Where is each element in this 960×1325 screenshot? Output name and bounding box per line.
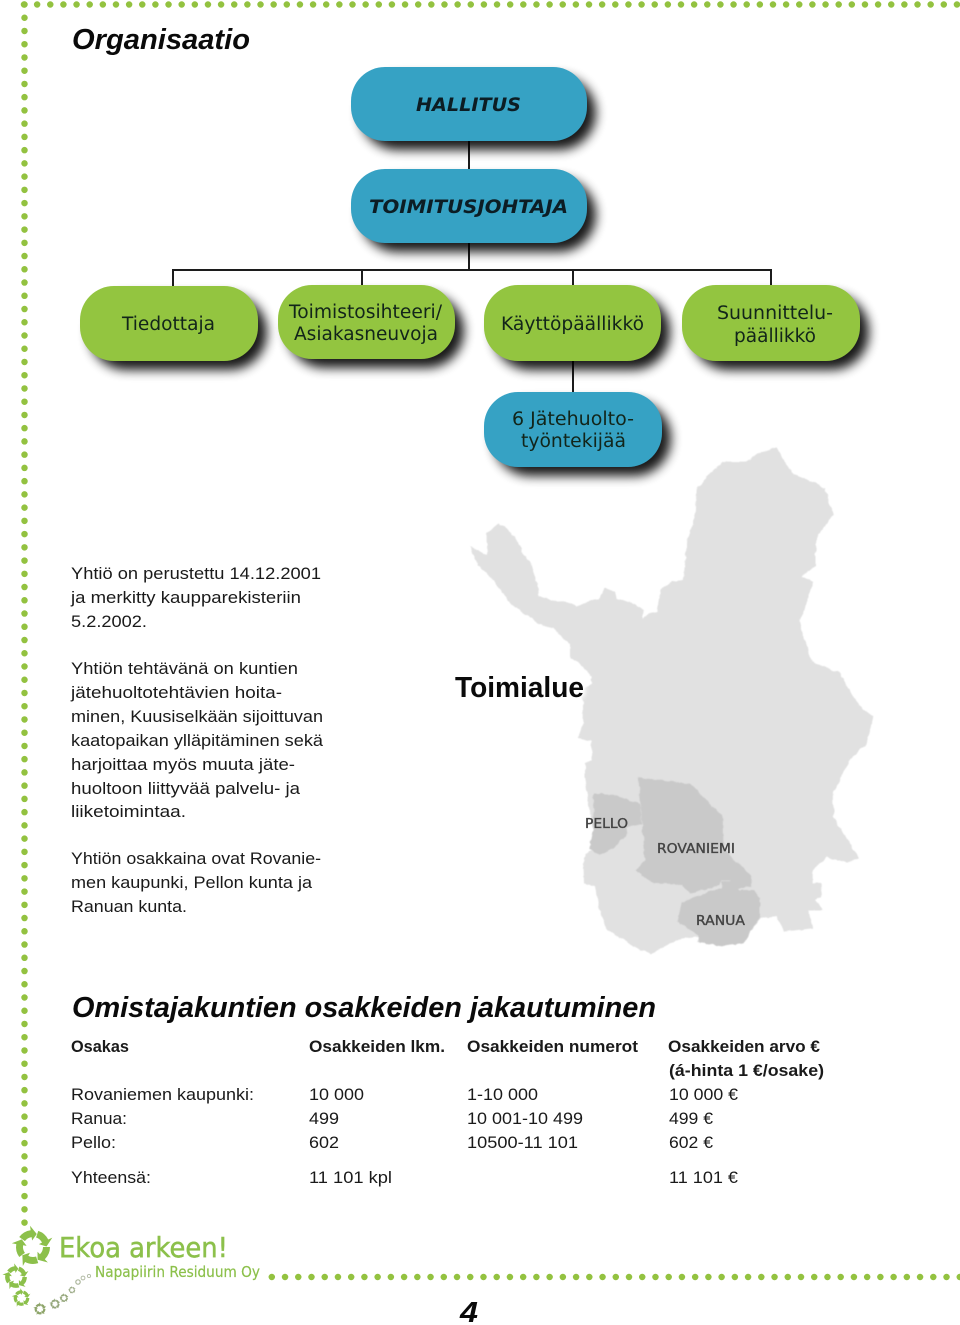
text block: company task: liiketoimintaa. <box>71 802 186 821</box>
map label: Pello: PELLO <box>585 817 628 832</box>
org box: Käyttöpäällikkö: Käyttöpäällikkö <box>501 314 644 335</box>
text block: company task <box>70 659 324 821</box>
org box: Hallitus <box>351 67 596 150</box>
row: Ranua: 499 <box>309 1109 339 1128</box>
row: total <box>71 1168 738 1187</box>
text block: company task: huoltoon liittyvää palvelu- ja <box>71 779 301 798</box>
org box: 6 Jätehuoltotyöntekijää: työntekijää <box>521 431 626 452</box>
text block: company task: kaatopaikan ylläpitäminen sekä <box>71 731 324 750</box>
row: Rovaniemi: Rovaniemen kaupunki: <box>71 1085 254 1104</box>
row: Rovaniemi: 1-10 000 <box>467 1085 538 1104</box>
logo: Ekoa arkeen <box>1 1224 260 1316</box>
row: Rovaniemi: 10 000 € <box>669 1085 738 1104</box>
row: Pello: 10500-11 101 <box>467 1133 578 1152</box>
logo subtitle: Napapiirin Residuum Oy <box>95 1263 260 1281</box>
org box: Hallitus: HALLITUS <box>416 94 521 116</box>
org box: Tiedottaja <box>80 286 267 370</box>
text block: shareholders: men kaupunki, Pellon kunta ja <box>71 873 313 892</box>
heading: Organisaatio: Organisaatio <box>72 24 250 56</box>
logo text: Ekoa arkeen! <box>59 1231 228 1264</box>
text block: shareholders: Yhtiön osakkaina ovat Rovanie- <box>71 849 321 868</box>
map label: Rovaniemi: ROVANIEMI <box>657 842 735 857</box>
org box: Suunnittelupäällikkö <box>682 285 869 370</box>
row: Ranua: 10 001-10 499 <box>467 1109 583 1128</box>
text block: shareholders <box>71 849 321 916</box>
row: Ranua: 499 € <box>669 1109 713 1128</box>
connector lines <box>173 141 771 392</box>
table header: Osakkeiden arvo € <box>668 1037 820 1056</box>
text block: company task: harjoittaa myös muuta jäte- <box>71 755 295 774</box>
row: Rovaniemi: 10 000 <box>309 1085 364 1104</box>
text block: company task: Yhtiön tehtävänä on kuntien <box>71 659 298 678</box>
map label: Ranua: RANUA <box>696 914 745 929</box>
row: Pello: 602 € <box>669 1133 713 1152</box>
row: Ranua: Ranua: <box>71 1109 127 1128</box>
logo icon: recycling swirls <box>1 1224 91 1316</box>
table header: Osakas <box>71 1037 129 1056</box>
table header: Osakkeiden numerot <box>467 1037 638 1056</box>
row: total: Yhteensä: <box>71 1168 151 1187</box>
row: Pello: 602 <box>309 1133 339 1152</box>
map: Toimialue region <box>470 447 873 955</box>
org box: Toimitusjohtaja: TOIMITUSJOHTAJA <box>369 196 568 218</box>
row: Pello <box>71 1133 713 1152</box>
table header: Osakkeiden lkm. <box>309 1037 445 1056</box>
text block: founding: Yhtiö on perustettu 14.12.2001 <box>71 564 321 583</box>
text block: shareholders: Ranuan kunta. <box>71 897 187 916</box>
row: total: 11 101 kpl <box>309 1168 392 1187</box>
heading: Toimialue: Toimialue <box>455 672 584 704</box>
org box: Toimistosihteeri / Asiakasneuvoja: Toimistosihteeri/ <box>288 302 443 323</box>
org box: Toimistosihteeri / Asiakasneuvoja: Asiakasneuvoja <box>294 324 438 345</box>
table header: (á-hinta 1 €/osake) <box>669 1061 824 1080</box>
org box: 6 Jätehuoltotyöntekijää <box>484 392 671 476</box>
row: Pello: Pello: <box>71 1133 116 1152</box>
row: total: 11 101 € <box>669 1168 738 1187</box>
heading: Toimialue: Toimialue <box>455 672 584 704</box>
row: Ranua <box>71 1109 713 1128</box>
text block: founding: ja merkitty kaupparekisteriin <box>70 588 301 607</box>
org box: Tiedottaja: Tiedottaja <box>121 314 215 335</box>
org box: Toimistosihteeri / Asiakasneuvoja <box>278 285 464 368</box>
org box: Käyttöpäällikkö <box>484 285 670 370</box>
table header <box>71 1037 824 1080</box>
row: Rovaniemi <box>71 1085 738 1104</box>
org box: Suunnittelupäällikkö: Suunnittelu- <box>717 303 833 324</box>
org box: 6 Jätehuoltotyöntekijää: 6 Jätehuolto- <box>512 409 634 430</box>
text block: company task: minen, Kuusiselkään sijoittuvan <box>71 707 323 726</box>
org box: Toimitusjohtaja <box>351 169 596 252</box>
heading: ownership distribution: Omistajakuntien osakkeiden jakautuminen <box>72 992 656 1024</box>
org box: Suunnittelupäällikkö: päällikkö <box>734 326 816 347</box>
text block: founding <box>70 564 321 631</box>
text block: founding: 5.2.2002. <box>71 612 147 631</box>
text block: company task: jätehuoltotehtävien hoita- <box>70 683 282 702</box>
table: shareholders <box>71 1037 824 1187</box>
